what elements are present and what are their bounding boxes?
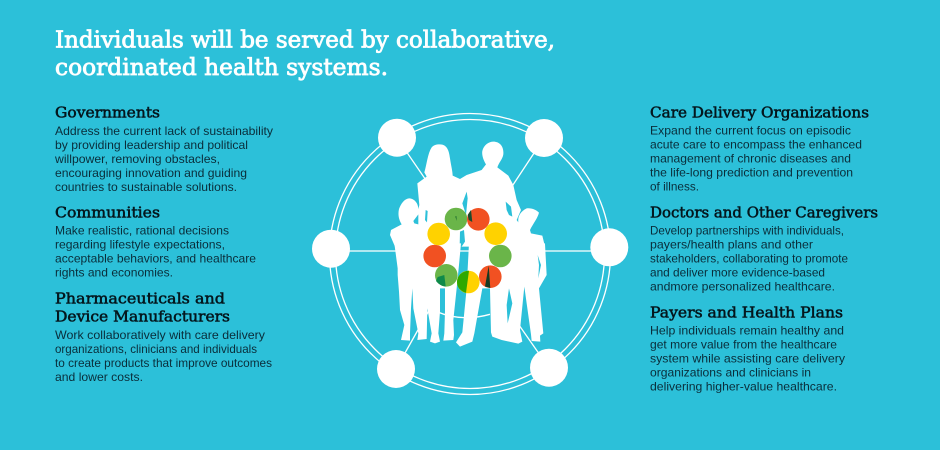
text block: doctors: Develop partnerships with individuals, [650, 224, 844, 238]
panel: governments [54, 104, 273, 194]
red dot left [423, 245, 446, 267]
text block: pharmaceuticals [55, 328, 272, 384]
double ring [330, 114, 610, 394]
heading: doctors: Doctors and Other Caregivers [650, 204, 878, 222]
yellow dot upper left [427, 223, 450, 245]
heading: communities: Communities [55, 204, 160, 222]
family silhouette [390, 142, 547, 347]
silhouette: lower bodies [394, 243, 547, 347]
nodes [312, 119, 628, 388]
text block: communities: rights and economies. [55, 266, 173, 280]
silhouette: upper bodies [390, 142, 545, 247]
text block: doctors: and deliver more evidence-based [650, 266, 825, 280]
text block: care delivery [650, 124, 862, 194]
text block: payers [650, 324, 845, 394]
green dot top [445, 208, 467, 230]
heading: care delivery: Care Delivery Organizations [650, 104, 869, 122]
yellow dot bottom [457, 271, 480, 293]
red dot lower right [479, 265, 502, 288]
text block: doctors: andmore personalized healthcare. [650, 280, 835, 294]
text block: payers: system while assisting care delivery [650, 352, 845, 366]
text block: governments: encouraging innovation and guiding [55, 166, 247, 180]
panel: communities [55, 204, 256, 280]
text block: care delivery: management of chronic diseases and [650, 152, 851, 166]
text block: governments [54, 124, 273, 194]
yellow dot upper right [484, 222, 507, 245]
text block: governments: willpower, removing obstacles, [54, 152, 220, 166]
text block: governments: Address the current lack of sustainability [55, 124, 273, 138]
heading: pharmaceuticals: Pharmaceuticals and [55, 290, 225, 308]
network diagram [312, 114, 628, 394]
green dot right [489, 245, 512, 267]
text block: governments: countries to sustainable solutions. [55, 180, 237, 194]
connector lines [331, 138, 609, 369]
text block: payers: Help individuals remain healthy and [650, 324, 844, 338]
text block: pharmaceuticals: to create products that improve outcomes [55, 356, 272, 370]
text block: care delivery: acute care to encompass the enhanced [650, 138, 862, 152]
ring of coloured dots [423, 208, 512, 293]
panel: care delivery organizations [650, 104, 869, 194]
panel: doctors and other caregivers [650, 204, 878, 294]
heading: payers: Payers and Health Plans [650, 304, 843, 322]
title: coordinated health systems. [55, 55, 388, 81]
text block: communities: Make realistic, rational decisions [55, 224, 229, 238]
text block: doctors: stakeholders, collaborating to promote [650, 252, 848, 266]
text block: pharmaceuticals: and lower costs. [55, 370, 143, 384]
text block: payers: get more value from the healthcare [650, 338, 837, 352]
dot overlaps [436, 210, 490, 293]
heading: pharmaceuticals [55, 290, 230, 326]
text block: pharmaceuticals: Work collaboratively with care delivery [55, 328, 265, 342]
text block: communities: regarding lifestyle expectations, [55, 238, 225, 252]
title [55, 28, 555, 81]
text block: communities: acceptable behaviors, and healthcare [55, 252, 256, 266]
text block: care delivery: of illness. [650, 180, 699, 194]
text block: doctors: payers/health plans and other [650, 238, 813, 252]
text block: governments: by providing leadership and political [55, 138, 248, 152]
heading: governments: Governments [55, 104, 160, 122]
text block: payers: delivering higher-value healthcare. [650, 380, 837, 394]
text block: communities [55, 224, 256, 280]
panel: payers and health plans [650, 304, 845, 394]
green dot lower left [435, 264, 458, 287]
text block: payers: organizations and clinicians in [650, 366, 811, 380]
text block: doctors [650, 224, 848, 294]
text block: care delivery: Expand the current focus on episodic [650, 124, 851, 138]
text block: pharmaceuticals: organizations, clinicians and individuals [55, 342, 257, 356]
title: Individuals will be served by collaborative, [55, 28, 555, 54]
heading: pharmaceuticals: Device Manufacturers [55, 308, 230, 326]
panel: pharmaceuticals and device manufacturers [55, 290, 272, 384]
text block: care delivery: the life-long prediction and prevention [650, 166, 853, 180]
red dot top [467, 208, 490, 231]
